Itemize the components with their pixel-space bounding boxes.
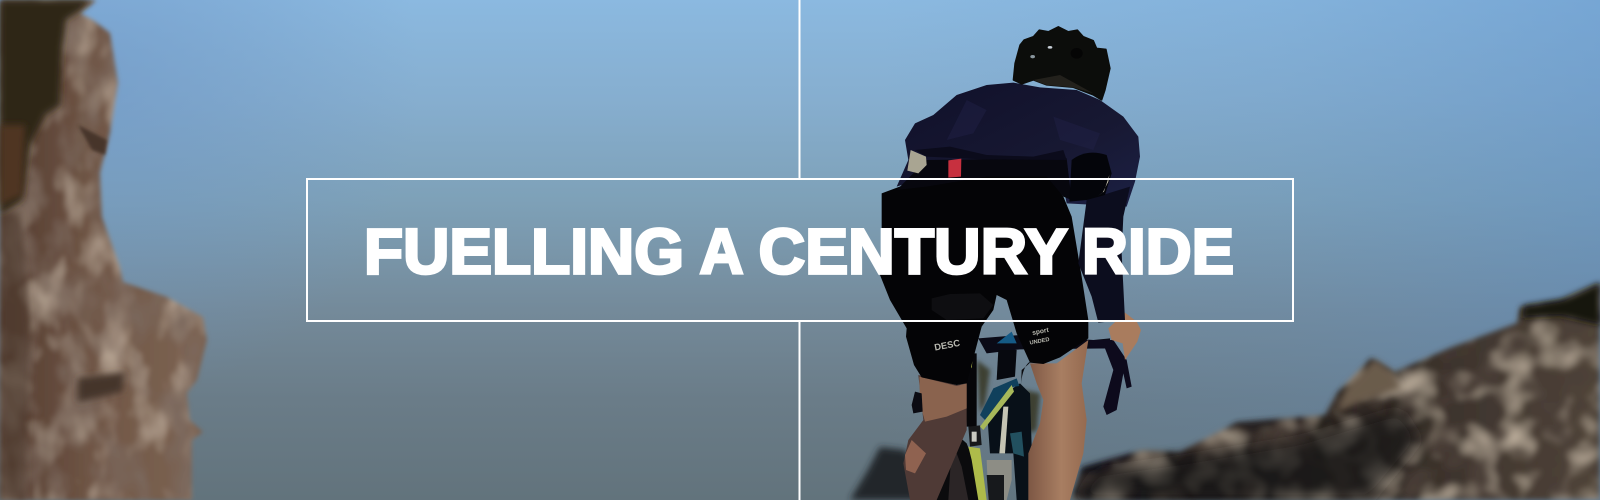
blurred background foliage [977, 360, 1040, 433]
bicycle [933, 328, 1110, 500]
title [364, 216, 1234, 288]
handlebar drop [1090, 340, 1132, 415]
rider right leg [1028, 340, 1088, 500]
rider shorts [880, 170, 1088, 385]
title: FUELLING [364, 216, 684, 288]
rider left leg [903, 375, 967, 500]
shorts logos: sport [1032, 327, 1050, 337]
tan jersey pocket [907, 150, 927, 173]
blurred trees behind rider [850, 447, 925, 500]
shorts waistband shadow [897, 158, 1072, 200]
title: A [700, 216, 744, 288]
shorts logos: DESC [933, 338, 961, 353]
shorts logos [933, 327, 1050, 353]
cyclist [880, 27, 1141, 500]
red jersey stripe [948, 159, 961, 178]
vertical line top [798, 0, 800, 178]
title: CENTURY [759, 216, 1068, 288]
title: RIDE [1082, 216, 1234, 288]
jacket folds [915, 147, 1067, 160]
reflective stripe [1098, 175, 1109, 196]
shorts logos: UNDED [1029, 337, 1050, 347]
title frame [307, 179, 1293, 321]
saddle [932, 293, 993, 320]
rider jacket [897, 83, 1140, 207]
rider forearm [1078, 187, 1130, 323]
left cliff [0, 0, 207, 500]
vertical line bottom [798, 321, 800, 500]
right hillside [1071, 283, 1600, 500]
helmet [1013, 27, 1110, 100]
rider hand [1108, 313, 1141, 360]
